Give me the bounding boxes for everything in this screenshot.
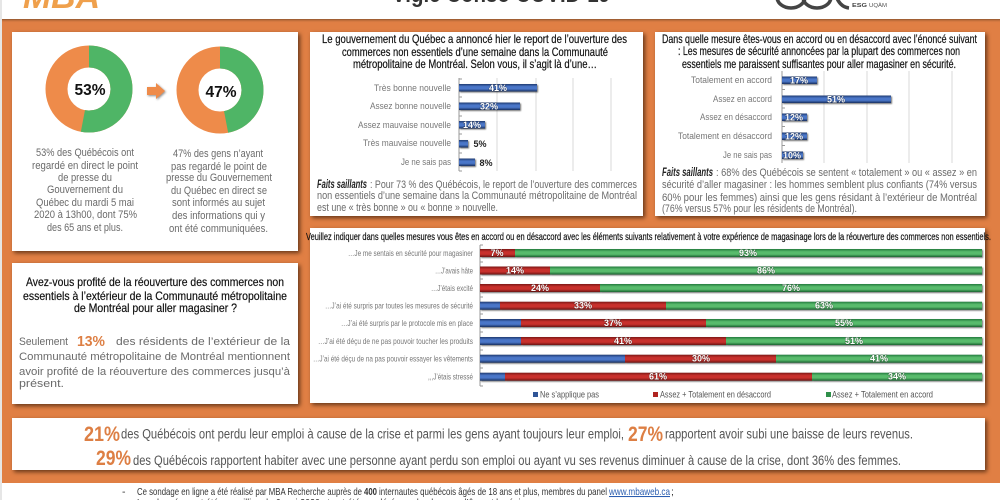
- faits saillants: Faits saillants: [317, 179, 367, 191]
- legend: [533, 390, 933, 400]
- page strip: [0, 0, 2, 500]
- text: 47% description: des informations qui y: [172, 210, 265, 222]
- stacked bar chart: 37%: [604, 318, 622, 328]
- line: 21% and 27%: 27%: [628, 423, 663, 446]
- stacked bar chart: …J’ai été surpris par toutes les mesures de sécurité: [325, 300, 473, 310]
- body text: Communauté métropolitaine de Montréal mentionnent: [19, 351, 290, 363]
- bar chart: 41%: [489, 83, 507, 93]
- stacked bar chart: …J’ai été déçu de ne pas pouvoir toucher les produits: [318, 336, 473, 346]
- text: 47% description: 47% des gens n’ayant: [173, 148, 263, 160]
- stacked bar chart: 61%: [649, 372, 667, 382]
- text: 53% description: regardé en direct le point: [32, 160, 138, 172]
- footer notes: Ce sondage en ligne a été réalisé par MBA Recherche auprès de: [137, 486, 362, 498]
- text: 53% description: de presse du: [58, 172, 112, 184]
- legend: Assez + Totalement en accord: [832, 390, 933, 400]
- bar chart: 14%: [463, 120, 481, 130]
- header: [23, 0, 887, 15]
- stacked bar chart: 76%: [782, 283, 800, 293]
- stacked bar chart: 55%: [835, 318, 853, 328]
- faits saillants: : Pour 73 % des Québécois, le report de l’ouverture des commerces: [370, 179, 637, 191]
- text: 47% description: [166, 148, 272, 235]
- text: 47% description: sont informés au sujet: [172, 197, 265, 209]
- bar chart: Totalement en accord: [691, 75, 772, 86]
- bar chart: Je ne sais pas: [723, 150, 772, 161]
- heading: métropolitaine de Montréal. Selon vous, il s’agit là d’une…: [353, 57, 597, 71]
- stacked bar chart: 7%: [490, 248, 504, 258]
- faits saillants: (76% versus 57% pour les résidents de Montréal).: [662, 203, 857, 215]
- bar chart: Je ne sais pas: [401, 157, 451, 168]
- bar chart: Totalement en désaccord: [678, 131, 772, 142]
- heading: Le gouvernement du Québec a annoncé hier le report de l’ouverture des: [322, 32, 627, 46]
- panel: live press point donuts: [12, 32, 298, 251]
- bar chart: 32%: [480, 102, 498, 112]
- line: 29%: [96, 447, 901, 470]
- text: 47% description: presse du Gouvernement: [166, 172, 272, 184]
- stacked bar chart: 93%: [739, 248, 757, 258]
- text: 53% description: Québec du mardi 5 mai: [36, 197, 134, 209]
- bar chart: 12%: [785, 132, 803, 142]
- bar chart: Assez mauvaise nouvelle: [358, 120, 451, 131]
- bar chart: 51%: [827, 94, 845, 104]
- bar chart: Très mauvaise nouvelle: [363, 138, 451, 149]
- text: 53% description: [32, 147, 138, 234]
- icon: arrow: [147, 83, 165, 99]
- stacked bar chart: …Je me sentais en sécurité pour magasiner: [348, 248, 473, 258]
- bar chart: 17%: [790, 76, 808, 86]
- logo: ESG UQAM: ESG: [852, 3, 867, 9]
- text: 47% description: pas regardé le point de: [171, 161, 267, 173]
- heading: [662, 32, 977, 71]
- panel: report de l'ouverture: [310, 32, 643, 216]
- footer notes: 400: [364, 486, 377, 498]
- stacked bar chart: 34%: [888, 372, 906, 382]
- heading: commerces non essentiels d’une semaine dans la Communauté: [342, 45, 608, 59]
- panel: mesures de sécurité: [655, 32, 985, 216]
- donut: 47%: [188, 58, 252, 122]
- panel: emploi et revenus: [12, 418, 985, 470]
- stacked bar chart: 41%: [870, 354, 888, 364]
- footer notes: -: [122, 486, 126, 498]
- text: 53% description: 2020 à 13h00, dont 75%: [34, 209, 137, 221]
- stacked bar chart: 14%: [506, 266, 524, 276]
- stacked bar chart: 63%: [815, 301, 833, 311]
- text: 47% description: ont été communiquées.: [169, 223, 268, 235]
- logo: ESG UQAM: [777, 0, 887, 9]
- logo: ESG UQAM: UQÀM: [869, 2, 887, 9]
- text: 53% description: Gouvernement du: [47, 184, 123, 196]
- heading: [23, 275, 287, 315]
- body text: 13%: [77, 334, 105, 350]
- bar chart: 12%: [785, 112, 803, 122]
- line: 29%: 29%: [96, 447, 131, 470]
- bar chart: 5%: [473, 139, 487, 149]
- faits saillants: Faits saillants: [662, 167, 713, 179]
- legend: Ne s’applique pas: [540, 390, 599, 400]
- stacked bar chart: ,,,J’étais stressé: [428, 372, 473, 382]
- bar chart: 8%: [479, 158, 493, 168]
- stacked bar chart: 41%: [614, 336, 632, 346]
- text: 53% description: 53% des Québécois ont: [36, 147, 134, 159]
- heading: essentiels à l’extérieur de la Communauté métropolitaine: [23, 289, 287, 303]
- donut: 53%: 53%: [74, 82, 106, 99]
- heading: de Montréal pour aller magasiner ?: [74, 301, 237, 315]
- stacked bar chart: 30%: [692, 354, 710, 364]
- bar chart: [358, 78, 611, 171]
- faits saillants: est une « très bonne » ou « bonne » nouvelle.: [317, 202, 498, 214]
- body text: [19, 334, 291, 390]
- heading: Avez-vous profité de la réouverture des commerces non: [26, 275, 284, 289]
- body text: présent.: [19, 378, 64, 390]
- bar chart: [678, 71, 952, 163]
- line: 21% and 27%: 21%: [84, 423, 120, 446]
- line: 21% and 27%: rapportent avoir subi une baisse de leurs revenus.: [665, 426, 913, 442]
- footer notes: www.mbaweb.ca: [608, 486, 670, 498]
- bar chart: Très bonne nouvelle: [374, 83, 451, 94]
- footer notes: ;: [671, 486, 674, 498]
- panel: expérience de magasinage: [306, 228, 991, 403]
- bar chart: Assez en accord: [713, 94, 772, 105]
- donut: 47%: 47%: [205, 84, 237, 101]
- stacked bar chart: …J’ai été déçu de na pas pouvoir essayer les vêtements: [313, 354, 473, 364]
- stacked bar chart: 86%: [757, 266, 775, 276]
- legend: Assez + Totalement en désaccord: [660, 390, 771, 400]
- body text: des résidents de l’extérieur de la: [116, 336, 291, 348]
- bar chart: Assez bonne nouvelle: [370, 101, 451, 112]
- line: 21% and 27%: des Québécois ont perdu leur emploi à cause de la crise et parmi les gens ayant toujours leur emploi,: [121, 426, 624, 442]
- faits saillants: [662, 167, 977, 215]
- bar chart: Assez en désaccord: [700, 112, 772, 123]
- body text: avoir profité de la réouverture des commerces jusqu’à: [19, 366, 291, 378]
- line: 21% and 27%: [84, 423, 913, 446]
- faits saillants: non essentiels d’une semaine dans la Communauté métropolitaine de Montréal: [317, 190, 637, 202]
- stacked bar chart: …J’étais excité: [431, 283, 473, 293]
- bar chart: 10%: [783, 150, 801, 160]
- stacked bar chart: [313, 245, 982, 386]
- heading: [322, 32, 627, 71]
- faits saillants: [317, 179, 637, 214]
- donut: 53%: [56, 56, 122, 122]
- stacked bar chart: …J’ai été surpris par le protocole mis en place: [341, 318, 473, 328]
- stacked bar chart: 33%: [574, 301, 592, 311]
- stacked bar chart: 24%: [531, 283, 549, 293]
- text: 53% description: des 65 ans et plus.: [47, 222, 123, 234]
- stacked bar chart: …J’avais hâte: [435, 266, 473, 276]
- footer notes: internautes québécois âgés de 18 ans et plus, membres du panel: [379, 486, 607, 498]
- stacked bar chart: 51%: [845, 336, 863, 346]
- text: 47% description: du Québec en direct se: [171, 185, 267, 197]
- panel: réouverture à l'extérieur: [12, 263, 298, 404]
- footer notes: [122, 486, 674, 500]
- body text: Seulement: [19, 336, 68, 348]
